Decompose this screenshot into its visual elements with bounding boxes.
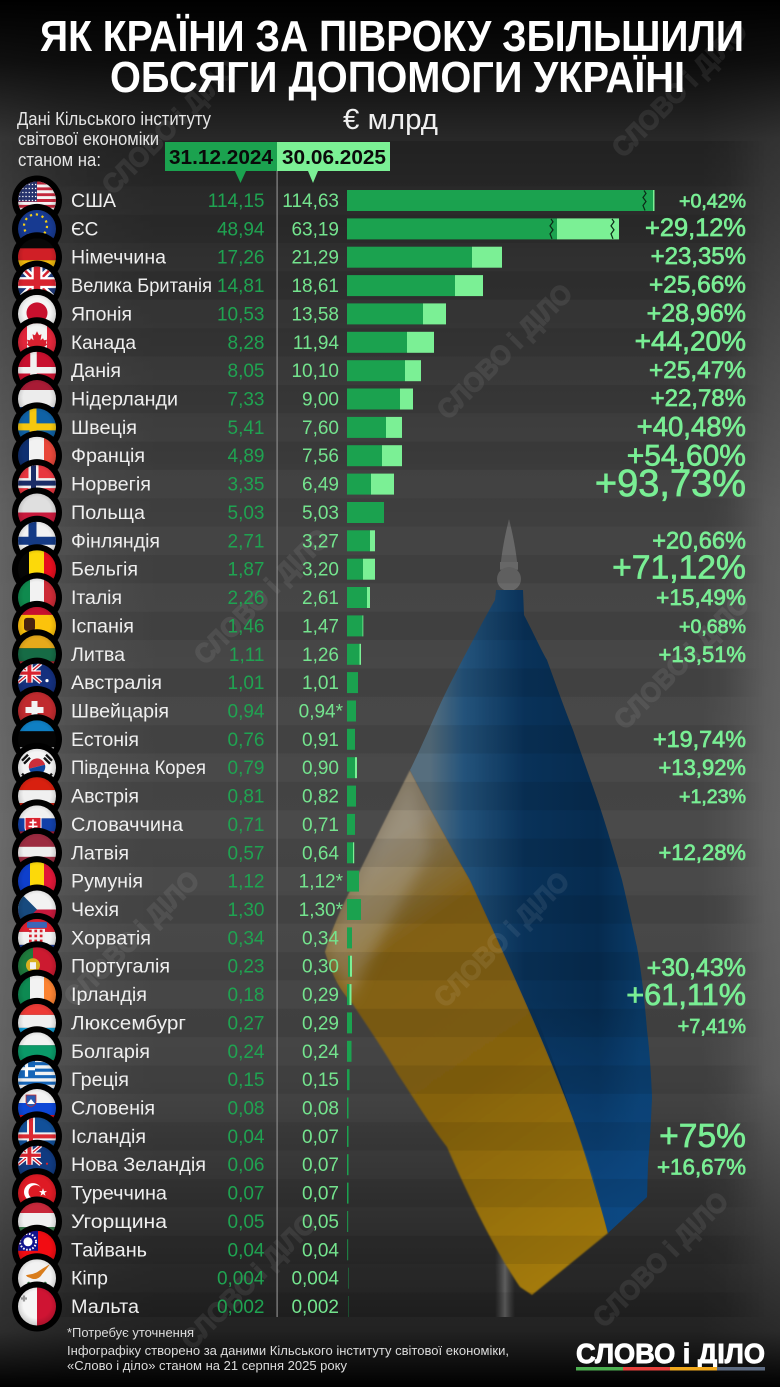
bar: Литва bbox=[347, 644, 361, 665]
row: Румунія bbox=[12, 856, 359, 906]
row: Словаччина bbox=[12, 799, 355, 849]
row: Південна Корея: +13,92% bbox=[659, 755, 746, 780]
row: Фінляндія: Фінляндія bbox=[71, 531, 160, 552]
row: Італія: Італія bbox=[71, 588, 122, 609]
row: Австрія: Австрія bbox=[71, 787, 139, 808]
row: Люксембург: Люксембург bbox=[71, 1013, 186, 1034]
row: Канада: 8,28 bbox=[228, 333, 264, 354]
footnote bbox=[67, 1325, 509, 1373]
flag: Ireland bbox=[12, 970, 62, 1020]
flag: Taiwan bbox=[12, 1225, 62, 1275]
row: Латвія: +12,28% bbox=[659, 840, 746, 865]
source note bbox=[17, 109, 211, 170]
bar: ЄС bbox=[347, 218, 619, 239]
row: Франція: 4,89 bbox=[228, 446, 264, 467]
row: Болгарія bbox=[12, 1026, 352, 1076]
row: Німеччина: +23,35% bbox=[651, 243, 746, 270]
flag: Slovakia bbox=[12, 799, 62, 849]
row: Литва bbox=[12, 629, 746, 668]
bar: Словенія bbox=[347, 1098, 348, 1118]
row: Швеція: Швеція bbox=[71, 418, 137, 439]
row: Словаччина: 0,71 bbox=[228, 815, 264, 836]
row: Велика Британія: Велика Британія bbox=[71, 276, 212, 297]
row: Нідерланди: 7,33 bbox=[228, 390, 264, 410]
bar: Бельгія bbox=[347, 559, 375, 580]
source note: Дані Кільського інституту bbox=[17, 109, 211, 129]
row: Бельгія: +71,12% bbox=[612, 549, 746, 587]
row: Данія: Данія bbox=[71, 361, 121, 382]
bar: Канада bbox=[347, 332, 434, 353]
flag pale highlight bbox=[326, 775, 430, 1000]
row: Тайвань bbox=[12, 1225, 348, 1275]
row: Ірландія: 0,29 bbox=[302, 985, 339, 1006]
flag: Belgium bbox=[12, 544, 62, 584]
row: Франція: 7,56 bbox=[302, 446, 339, 467]
row: Японія: 13,58 bbox=[291, 304, 339, 325]
row: Чехія: Чехія bbox=[71, 900, 119, 921]
row: Нідерланди: 9,00 bbox=[302, 390, 339, 410]
row: ЄС bbox=[12, 204, 746, 243]
row: США: +0,42% bbox=[679, 191, 746, 213]
bar: Австралія bbox=[347, 672, 358, 693]
row: Словенія: 0,08 bbox=[228, 1098, 264, 1120]
flag: Lithuania bbox=[12, 629, 62, 668]
row: Нова Зеландія: Нова Зеландія bbox=[71, 1155, 206, 1176]
row: Ісландія: 0,07 bbox=[302, 1127, 339, 1148]
row: Швейцарія: 0,94* bbox=[299, 702, 344, 722]
row: Греція: 0,15 bbox=[302, 1070, 339, 1091]
row: Данія: 10,10 bbox=[291, 361, 339, 382]
row: Естонія: Естонія bbox=[71, 730, 139, 751]
watermarks: СЛОВО і ДІЛО bbox=[188, 523, 335, 670]
row: Португалія bbox=[12, 941, 746, 991]
row: ЄС: 63,19 bbox=[291, 219, 339, 240]
row: Польща: 5,03 bbox=[302, 503, 339, 524]
row: Італія: 2,61 bbox=[302, 588, 339, 609]
row: Польща: 5,03 bbox=[228, 503, 264, 524]
row: Канада: Канада bbox=[71, 333, 136, 354]
photo: Ukrainian flag on a pole bbox=[325, 519, 652, 1317]
row: Бельгія: Бельгія bbox=[71, 560, 138, 581]
row: Литва: 1,11 bbox=[229, 645, 264, 666]
flag: EU bbox=[12, 204, 62, 243]
row: Португалія: 0,30 bbox=[302, 957, 339, 978]
row: Німеччина: Німеччина bbox=[71, 248, 166, 269]
row: Нідерланди: Нідерланди bbox=[71, 390, 178, 410]
row: Нова Зеландія: 0,06 bbox=[228, 1155, 264, 1176]
bar: Латвія bbox=[347, 842, 354, 863]
bar: Італія bbox=[347, 587, 370, 608]
row: Кіпр: 0,004 bbox=[217, 1269, 265, 1290]
row: Словаччина: Словаччина bbox=[71, 815, 183, 836]
flag: Slovenia bbox=[12, 1083, 62, 1133]
row: Нова Зеландія: 0,07 bbox=[302, 1155, 339, 1176]
row: Швеція bbox=[12, 402, 746, 442]
flag: Switzerland bbox=[12, 686, 62, 736]
bar: Тайвань bbox=[347, 1239, 348, 1260]
flag: Iceland bbox=[12, 1111, 62, 1161]
title bbox=[40, 12, 744, 102]
bar: Польща bbox=[347, 502, 384, 523]
row: Люксембург bbox=[12, 998, 746, 1048]
row: Португалія: +30,43% bbox=[647, 954, 746, 982]
flag: Romania bbox=[12, 856, 62, 906]
row: Ірландія: Ірландія bbox=[71, 985, 147, 1006]
bar: Південна Корея bbox=[347, 757, 357, 778]
row: Польща: Польща bbox=[71, 503, 145, 524]
flag: Hungary bbox=[12, 1196, 62, 1246]
row: Японія: 10,53 bbox=[217, 304, 264, 325]
row: Австрія bbox=[12, 771, 746, 821]
bar: Австрія bbox=[347, 786, 356, 807]
row: Іспанія: 1,46 bbox=[228, 616, 264, 637]
flag: Norway bbox=[12, 459, 62, 498]
bar: Люксембург bbox=[347, 1012, 352, 1033]
row: Швейцарія: 0,94 bbox=[228, 702, 265, 722]
bar: Мальта bbox=[348, 1296, 349, 1317]
flag: Bulgaria bbox=[12, 1026, 62, 1076]
row: Іспанія bbox=[12, 600, 746, 640]
row: Іспанія: +0,68% bbox=[679, 616, 746, 638]
row: Канада: 11,94 bbox=[293, 333, 339, 354]
row: Норвегія: +93,73% bbox=[595, 463, 746, 505]
row: ЄС: ЄС bbox=[71, 219, 98, 240]
row: Естонія: 0,76 bbox=[228, 730, 264, 751]
row: Південна Корея: Південна Корея bbox=[71, 758, 206, 779]
row: Швеція: 7,60 bbox=[302, 418, 339, 439]
flag: Luxembourg bbox=[12, 998, 62, 1048]
row: Тайвань: Тайвань bbox=[71, 1240, 147, 1261]
date badge: 30.06.2025 bbox=[277, 142, 390, 183]
row: Нідерланди bbox=[12, 374, 746, 414]
row: Італія bbox=[12, 572, 746, 612]
row: Тайвань: 0,04 bbox=[302, 1240, 339, 1261]
row: Ісландія: Ісландія bbox=[71, 1127, 146, 1148]
row: Польща bbox=[12, 488, 384, 527]
row: Канада: +44,20% bbox=[635, 325, 746, 356]
row: Японія: +28,96% bbox=[647, 299, 746, 327]
row: Австралія: 1,01 bbox=[228, 673, 264, 694]
flag: Croatia bbox=[12, 913, 62, 963]
row: Португалія: Португалія bbox=[71, 957, 170, 978]
unit label: € млрд bbox=[343, 104, 438, 136]
row: Велика Британія: 14,81 bbox=[217, 276, 264, 297]
date badge: 30.06.2025: 30.06.2025 bbox=[282, 147, 386, 169]
flag: Turkey bbox=[12, 1168, 62, 1218]
flag pole bbox=[495, 1235, 515, 1317]
date badge: 31.12.2024: 31.12.2024 bbox=[169, 147, 274, 169]
row: Фінляндія: 2,71 bbox=[228, 531, 264, 552]
row: Швейцарія bbox=[12, 686, 356, 736]
row: Чехія bbox=[12, 884, 361, 934]
row: Португалія: 0,23 bbox=[228, 957, 264, 978]
row: Латвія: Латвія bbox=[71, 843, 129, 864]
row: Угорщина: 0,05 bbox=[228, 1212, 264, 1233]
row: Іспанія: Іспанія bbox=[71, 616, 134, 637]
row: Хорватія bbox=[12, 913, 352, 963]
footnote: «Слово і діло» станом на 21 серпня 2025 року bbox=[67, 1358, 348, 1373]
bar: Угорщина bbox=[347, 1211, 348, 1232]
flag: Italy bbox=[12, 572, 62, 612]
row: Тайвань: 0,04 bbox=[228, 1240, 265, 1261]
row: Іспанія: 1,47 bbox=[302, 616, 339, 637]
bar: Норвегія bbox=[347, 474, 394, 495]
footnote: Інфографіку створено за даними Кільського інституту світової економіки, bbox=[67, 1343, 509, 1358]
watermarks: СЛОВО і ДІЛО bbox=[606, 16, 753, 163]
flag: UK bbox=[12, 260, 62, 300]
row: США: 114,15 bbox=[208, 191, 264, 212]
source note: світової економіки bbox=[18, 129, 159, 149]
row: Словенія: 0,08 bbox=[302, 1098, 339, 1120]
row: Італія: 2,26 bbox=[228, 588, 264, 609]
row: Кіпр: 0,004 bbox=[291, 1269, 339, 1290]
row: Австрія: +1,23% bbox=[679, 786, 746, 808]
watermarks: СЛОВО і ДІЛО bbox=[608, 588, 755, 735]
bar: США bbox=[347, 190, 654, 211]
flag: Greece bbox=[12, 1055, 62, 1105]
row: Болгарія: 0,24 bbox=[302, 1042, 339, 1063]
row: Австрія: 0,81 bbox=[228, 787, 264, 808]
flag: Czechia bbox=[12, 884, 62, 934]
row: Угорщина: 0,05 bbox=[302, 1212, 339, 1233]
flag: Cyprus bbox=[12, 1253, 62, 1303]
row: Ісландія: +75% bbox=[659, 1118, 746, 1155]
flag yellow stripe bbox=[325, 770, 608, 1295]
row: Румунія: 1,12* bbox=[299, 872, 344, 893]
row: Кіпр bbox=[12, 1253, 349, 1303]
row: Греція bbox=[12, 1055, 350, 1105]
row: Велика Британія bbox=[12, 260, 746, 300]
row: Естонія: +19,74% bbox=[653, 726, 746, 752]
row: Румунія: Румунія bbox=[71, 872, 143, 893]
row: Ірландія bbox=[12, 970, 746, 1020]
watermarks: СЛОВО і ДІЛО bbox=[587, 1186, 734, 1333]
row: Велика Британія: +25,66% bbox=[649, 272, 746, 299]
bar: Велика Британія bbox=[347, 275, 483, 296]
row: Фінляндія: +20,66% bbox=[652, 528, 746, 554]
row: Бельгія: 3,20 bbox=[302, 560, 339, 581]
row: Болгарія: Болгарія bbox=[71, 1042, 150, 1063]
flag: Portugal bbox=[12, 941, 62, 991]
bar: Японія bbox=[347, 303, 446, 324]
row: Словаччина: 0,71 bbox=[302, 815, 339, 836]
row: Естонія: 0,91 bbox=[302, 730, 339, 751]
row: Фінляндія: 3,27 bbox=[302, 531, 339, 552]
watermarks: СЛОВО і ДІЛО bbox=[58, 865, 205, 1012]
row: Греція: 0,15 bbox=[228, 1070, 264, 1091]
row: Чехія: 1,30 bbox=[228, 900, 264, 921]
row: Франція: +54,60% bbox=[627, 440, 746, 473]
row: Франція: Франція bbox=[71, 446, 145, 467]
row: Японія bbox=[12, 288, 746, 328]
row: Німеччина: 17,26 bbox=[217, 248, 264, 269]
row: Австрія: 0,82 bbox=[302, 787, 339, 808]
row: ЄС: 48,94 bbox=[217, 219, 265, 240]
row: Бельгія: 1,87 bbox=[228, 560, 264, 581]
bar: Ірландія bbox=[347, 984, 352, 1005]
row: Південна Корея bbox=[12, 743, 746, 793]
row: Мальта: 0,002 bbox=[217, 1297, 264, 1318]
row: Болгарія: 0,24 bbox=[228, 1042, 265, 1063]
watermarks: СЛОВО і ДІЛО bbox=[431, 278, 578, 425]
row: Литва: Литва bbox=[71, 645, 125, 666]
row: Румунія: 1,12 bbox=[228, 872, 264, 893]
row: Норвегія bbox=[12, 459, 746, 502]
row: Угорщина: Угорщина bbox=[71, 1212, 167, 1233]
flag: Malta bbox=[12, 1282, 62, 1332]
flag finial bbox=[497, 519, 521, 591]
row: Канада bbox=[12, 317, 746, 356]
row: Хорватія: 0,34 bbox=[228, 928, 265, 949]
row: Данія: +25,47% bbox=[649, 357, 746, 384]
row: Данія bbox=[12, 346, 746, 385]
row: Латвія: 0,57 bbox=[228, 843, 264, 864]
flag: Australia bbox=[12, 658, 62, 697]
row: Фінляндія bbox=[12, 516, 746, 555]
row: Мальта bbox=[12, 1282, 349, 1332]
bar: Словаччина bbox=[347, 814, 355, 835]
flag: Poland bbox=[12, 488, 62, 527]
flag: Finland bbox=[12, 516, 62, 555]
flag: Denmark bbox=[12, 346, 62, 385]
flag blue lower highlight bbox=[510, 953, 652, 1233]
source note: станом на: bbox=[18, 150, 101, 170]
row stripes bbox=[60, 232, 742, 1317]
logo: Слово і Діло: СЛОВО і ДІЛО bbox=[576, 1338, 765, 1369]
row: Мальта: Мальта bbox=[71, 1297, 139, 1318]
row: Нова Зеландія: +16,67% bbox=[657, 1155, 746, 1180]
row: Естонія bbox=[12, 714, 746, 764]
bar: Німеччина bbox=[347, 247, 502, 268]
bar: Греція bbox=[347, 1069, 350, 1090]
row: Угорщина bbox=[12, 1196, 348, 1246]
row: Туреччина bbox=[12, 1168, 348, 1218]
row: Ісландія: 0,04 bbox=[228, 1127, 265, 1148]
row: Туреччина: Туреччина bbox=[71, 1184, 167, 1205]
bar: Румунія bbox=[347, 871, 359, 892]
flag: Austria bbox=[12, 771, 62, 821]
row: Нідерланди: +22,78% bbox=[651, 385, 746, 412]
flag: France bbox=[12, 430, 62, 470]
bar: Швейцарія bbox=[347, 700, 356, 722]
date badge: 31.12.2024 bbox=[165, 142, 277, 183]
row: США bbox=[12, 176, 746, 214]
row: США: США bbox=[71, 191, 116, 212]
row: Норвегія: Норвегія bbox=[71, 475, 151, 496]
flag: New Zealand bbox=[12, 1140, 62, 1190]
row: Франція bbox=[12, 430, 746, 470]
bar: Хорватія bbox=[347, 927, 352, 948]
row: Норвегія: 6,49 bbox=[302, 475, 339, 496]
row: США: 114,63 bbox=[282, 191, 339, 212]
bar: Франція bbox=[347, 445, 402, 466]
row: Туреччина: 0,07 bbox=[302, 1184, 339, 1205]
bar: Данія bbox=[347, 360, 421, 381]
row: Чехія: 1,30* bbox=[299, 900, 344, 921]
bar: Фінляндія bbox=[347, 530, 375, 551]
bar: Кіпр bbox=[348, 1268, 349, 1289]
bar: Чехія bbox=[347, 899, 361, 920]
row: Люксембург: 0,27 bbox=[228, 1013, 264, 1034]
bar: Нідерланди bbox=[347, 388, 413, 410]
row: Швеція: +40,48% bbox=[637, 411, 746, 442]
bar: Португалія bbox=[348, 956, 352, 977]
flag: Canada bbox=[12, 317, 62, 356]
row: Хорватія: 0,34 bbox=[302, 928, 339, 949]
row: Кіпр: Кіпр bbox=[71, 1269, 108, 1290]
row: Швейцарія: Швейцарія bbox=[71, 702, 169, 722]
flag: Japan bbox=[12, 288, 62, 328]
bar: Болгарія bbox=[347, 1041, 352, 1062]
row: Ісландія bbox=[12, 1111, 746, 1161]
bar: Іспанія bbox=[347, 615, 363, 636]
row: Італія: +15,49% bbox=[656, 585, 746, 610]
row: Туреччина: 0,07 bbox=[228, 1184, 264, 1205]
row: Ірландія: 0,18 bbox=[228, 985, 264, 1006]
footnote: *Потребує уточнення bbox=[67, 1325, 194, 1340]
title: ОБСЯГИ ДОПОМОГИ УКРАЇНІ bbox=[110, 53, 685, 102]
row: ЄС: +29,12% bbox=[645, 214, 746, 242]
row: Німеччина bbox=[12, 232, 746, 272]
watermarks: СЛОВО і ДІЛО bbox=[96, 53, 243, 200]
row: Греція: Греція bbox=[71, 1070, 129, 1091]
row: Литва: 1,26 bbox=[302, 645, 339, 666]
row: Словенія: Словенія bbox=[71, 1098, 155, 1120]
flag blue stripe bbox=[410, 590, 652, 1233]
flag: Spain bbox=[12, 600, 62, 640]
row: Люксембург: 0,29 bbox=[302, 1013, 339, 1034]
row: Словенія bbox=[12, 1083, 348, 1133]
flag: Netherlands bbox=[12, 374, 62, 414]
flag: USA bbox=[12, 176, 62, 214]
watermarks: СЛОВО і ДІЛО bbox=[428, 866, 575, 1013]
bar: Туреччина bbox=[347, 1183, 348, 1204]
row: Південна Корея: 0,79 bbox=[228, 758, 264, 779]
row: Японія: Японія bbox=[71, 304, 132, 325]
row: Норвегія: 3,35 bbox=[228, 475, 264, 496]
row: Ірландія: +61,11% bbox=[626, 977, 746, 1012]
row: Нова Зеландія bbox=[12, 1140, 746, 1190]
row: Австралія: 1,01 bbox=[302, 673, 339, 694]
flag: Sweden bbox=[12, 402, 62, 442]
row: Швеція: 5,41 bbox=[228, 418, 264, 439]
flag: Estonia bbox=[12, 714, 62, 764]
column divider bbox=[276, 171, 278, 1317]
row: Австралія: Австралія bbox=[71, 673, 162, 694]
flag: South Korea bbox=[12, 743, 62, 793]
row: Бельгія bbox=[12, 544, 746, 584]
row: Німеччина: 21,29 bbox=[291, 248, 339, 269]
bar: Ісландія bbox=[347, 1126, 348, 1147]
flag: Latvia bbox=[12, 828, 62, 878]
row: Мальта: 0,002 bbox=[291, 1297, 339, 1318]
row: Австралія bbox=[12, 658, 358, 697]
row: Південна Корея: 0,90 bbox=[302, 758, 339, 779]
row: Хорватія: Хорватія bbox=[71, 928, 151, 949]
flag: Germany bbox=[12, 232, 62, 272]
row: Латвія: 0,64 bbox=[302, 843, 339, 864]
row: Литва: +13,51% bbox=[659, 642, 746, 667]
bar: Нова Зеландія bbox=[347, 1154, 348, 1175]
row: Латвія bbox=[12, 828, 746, 878]
row: Данія: 8,05 bbox=[228, 361, 264, 382]
row: Велика Британія: 18,61 bbox=[291, 276, 339, 297]
bar: Естонія bbox=[347, 729, 355, 750]
watermarks: СЛОВО і ДІЛО bbox=[175, 1208, 322, 1355]
row: Люксембург: +7,41% bbox=[678, 1016, 746, 1038]
bar: Швеція bbox=[347, 417, 402, 438]
